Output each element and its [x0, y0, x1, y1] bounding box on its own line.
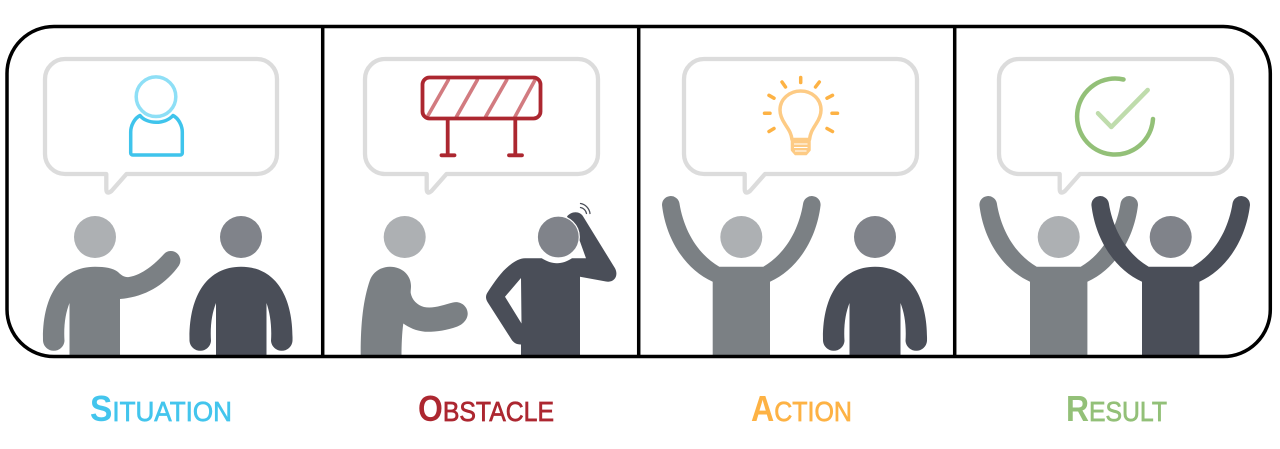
panel: situation	[43, 59, 293, 356]
person: right arms raised	[1091, 196, 1250, 356]
label: action: ACTION	[751, 388, 852, 429]
panel: obstacle	[361, 59, 616, 356]
speech bubble: result	[999, 59, 1232, 193]
icon: road barrier	[422, 78, 540, 155]
label: result: RESULT	[1066, 388, 1167, 429]
person: scratching head	[486, 204, 616, 356]
speech bubble: situation	[45, 59, 277, 193]
speech bubble: action	[684, 59, 917, 193]
label: obstacle: OBSTACLE	[418, 388, 554, 429]
icon: check mark	[1077, 79, 1153, 155]
panel: action	[662, 59, 927, 356]
panel: result	[979, 59, 1250, 356]
label: situation: SITUATION	[90, 388, 232, 429]
person: right listener	[189, 216, 293, 356]
person: arms raised	[662, 196, 821, 356]
person: left speaker	[43, 216, 180, 356]
icon: person	[131, 77, 182, 155]
icon: light bulb	[764, 78, 838, 154]
person: left arms raised	[979, 196, 1138, 356]
icon: scratch marks	[580, 204, 590, 214]
comic strip frame	[7, 26, 1270, 356]
speech bubble: obstacle	[365, 59, 598, 193]
person: right listener	[823, 216, 927, 356]
person: left speaker	[361, 216, 468, 356]
